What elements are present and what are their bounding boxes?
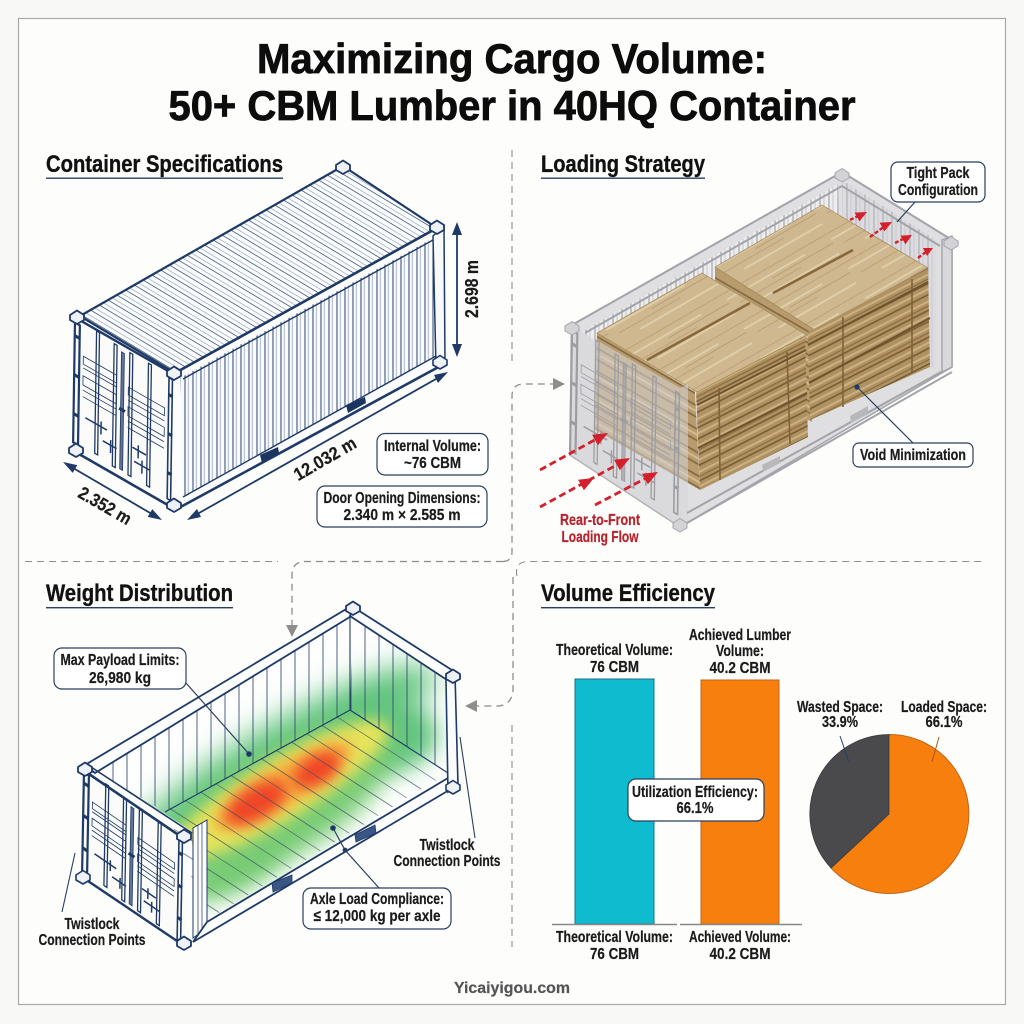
label: theoretical volume top [556,642,673,676]
callout: max payload limits [54,648,252,757]
panel: weight distribution [38,580,501,950]
label: wasted space [797,699,883,731]
callout: axle load compliance [303,825,451,929]
illustration: translucent container with lumber [565,168,958,532]
callout: twistlock connection points left [38,853,146,949]
callout: axle load compliance: Axle Load Compliance: [310,891,444,908]
callout: internal volume: ~76 CBM [404,455,461,472]
panel: container specifications [46,151,488,529]
dimension: height 2.698 m: 2.698 m [462,260,482,318]
callout: door opening dimensions [317,486,487,527]
label: achieved lumber volume top: Volume: [716,643,764,660]
illustration: closed shipping container [69,160,447,512]
callout: internal volume: Internal Volume: [384,438,481,455]
heading: weight distribution: Weight Distribution [46,580,233,607]
label: achieved volume axis [689,929,791,963]
callout: tight pack configuration: Configuration [898,182,978,199]
arrow: specifications to loading strategy [503,378,565,562]
label: theoretical volume top: Theoretical Volume: [556,642,673,659]
bar: theoretical volume [575,679,654,924]
callout: twistlock connection points left: Twistlock [64,916,120,933]
callout: twistlock connection points right: Twistlock [420,837,475,854]
dimension: height 2.698 m [452,222,482,357]
dimension: width 2.352 m [63,462,162,529]
bar chart: theoretical versus achieved volume [552,627,802,963]
footer: source: Yicaiyigou.com [454,980,570,997]
dimension: width 2.352 m: 2.352 m [75,483,135,529]
label: theoretical volume top: 76 CBM [590,659,639,676]
callout: void minimization: Void Minimization [860,447,966,464]
callout: door opening dimensions: 2.340 m × 2.585 m [344,507,460,524]
illustration: open container with heat map [76,602,460,950]
label: rear-to-front loading flow [560,512,641,546]
callout: max payload limits: Max Payload Limits: [60,652,180,669]
title: 50+ CBM Lumber in 40HQ Container [168,82,856,129]
callout: axle load compliance: ≤ 12,000 kg per axle [314,908,441,925]
label: loaded space: 66.1% [926,714,962,731]
heading: loading strategy: Loading Strategy [541,151,706,178]
callout: internal volume [377,434,488,475]
heading: volume efficiency: Volume Efficiency [541,580,716,607]
callout: max payload limits: 26,980 kg [89,670,151,687]
callout: twistlock connection points right [394,737,501,870]
pie chart: loaded versus wasted space [810,734,969,893]
label: wasted space: Wasted Space: [797,699,883,716]
label: wasted space: 33.9% [822,714,858,731]
arrow: specifications to weight distribution [286,562,503,637]
bar: achieved lumber volume [701,680,779,924]
heading: container specifications: Container Specifications [46,151,283,178]
label: loaded space [901,699,987,731]
label: theoretical volume axis [556,929,673,963]
panel: loading strategy [540,151,985,546]
label: achieved volume axis: Achieved Volume: [689,929,791,946]
heat map [138,647,446,916]
callout: tight pack configuration: Tight Pack [906,165,970,182]
label: achieved lumber volume top [689,627,791,677]
callout: utilization efficiency [628,779,764,821]
dimension: length 12.032 m: 12.032 m [290,433,360,485]
label: rear-to-front loading flow: Rear-to-Front [560,512,641,529]
title [168,35,856,129]
label: achieved volume axis: 40.2 CBM [710,946,770,963]
label: achieved lumber volume top: Achieved Lumber [689,627,791,644]
title: Maximizing Cargo Volume: [257,35,767,82]
label: achieved lumber volume top: 40.2 CBM [710,660,770,677]
callout: door opening dimensions: Door Opening Dimensions: [324,490,480,507]
callout: utilization efficiency: 66.1% [676,800,714,817]
panel: volume efficiency [541,580,987,963]
label: theoretical volume axis: 76 CBM [590,946,639,963]
callout: void minimization [853,384,973,467]
arrow: volume efficiency to weight distribution [465,577,513,712]
callout: tight pack configuration [891,162,985,222]
arrows: tight pack at far wall [850,212,933,258]
arrows: rear-to-front loading flow [540,433,658,507]
dimension: length 12.032 m [187,372,448,520]
label: rear-to-front loading flow: Loading Flow [562,529,639,546]
label: theoretical volume axis: Theoretical Volume: [556,929,673,946]
callout: twistlock connection points left: Connection Points [38,932,146,949]
callout: utilization efficiency: Utilization Efficiency: [632,784,758,801]
label: loaded space: Loaded Space: [901,699,987,716]
callout: twistlock connection points right: Connection Points [394,853,501,870]
